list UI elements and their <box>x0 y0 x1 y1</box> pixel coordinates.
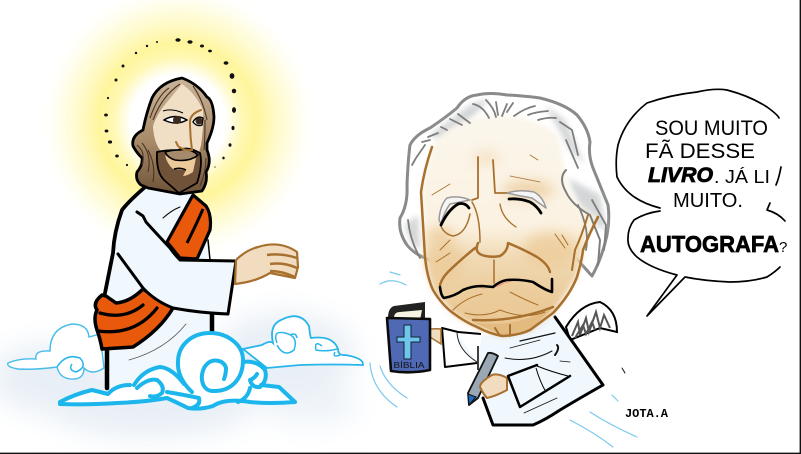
halo glow <box>38 0 318 262</box>
mouth <box>440 279 552 298</box>
hair shading <box>405 98 606 250</box>
right hand <box>480 374 507 398</box>
speech bubble: ? <box>779 239 787 256</box>
speech bubble: LIVRO <box>648 164 713 187</box>
figure: old man angel <box>387 94 625 425</box>
wing <box>566 302 617 340</box>
background cloud right <box>243 316 363 368</box>
front cloud <box>60 333 295 409</box>
speech bubble <box>616 89 787 316</box>
face <box>153 84 203 172</box>
right sleeve <box>508 365 570 407</box>
pen <box>468 353 498 405</box>
bubble text: SOU MUITO <box>655 117 768 140</box>
gown <box>477 317 603 425</box>
skin shadows <box>426 151 576 324</box>
book <box>387 302 430 372</box>
cloud swirls <box>57 332 340 372</box>
beard <box>157 149 201 193</box>
neck shade <box>473 308 553 336</box>
hand <box>235 244 298 284</box>
gown folds <box>505 333 625 413</box>
face outline and wrinkles <box>421 147 598 336</box>
lips <box>477 281 513 288</box>
speech bubble: AUTOGRAFA <box>640 231 779 257</box>
hair back <box>400 94 609 276</box>
speech bubble: . JÁ LI <box>714 167 770 187</box>
book: BÍBLIA <box>394 360 425 370</box>
light motion lines <box>370 272 637 447</box>
sleeve line <box>477 346 479 370</box>
speech bubble: FÃ DESSE <box>645 139 755 163</box>
shoulder sash <box>167 195 210 259</box>
sleeve <box>117 220 236 313</box>
hair <box>133 78 214 194</box>
eyebrows <box>439 191 546 224</box>
robe <box>105 188 212 390</box>
hair strokes <box>408 100 606 265</box>
background cloud left <box>8 324 104 379</box>
speech bubble: MUITO. <box>673 190 743 212</box>
halo dots <box>104 38 236 168</box>
signature: JOTA.A <box>625 407 669 421</box>
waist sash <box>95 289 173 349</box>
face skin <box>422 115 598 336</box>
left hand fingers <box>421 329 441 344</box>
nose <box>176 110 201 150</box>
figure: Jesus <box>95 78 298 390</box>
left sleeve <box>442 328 482 367</box>
cloud haze <box>0 313 360 437</box>
eyes <box>441 199 541 225</box>
eyes <box>163 110 203 126</box>
